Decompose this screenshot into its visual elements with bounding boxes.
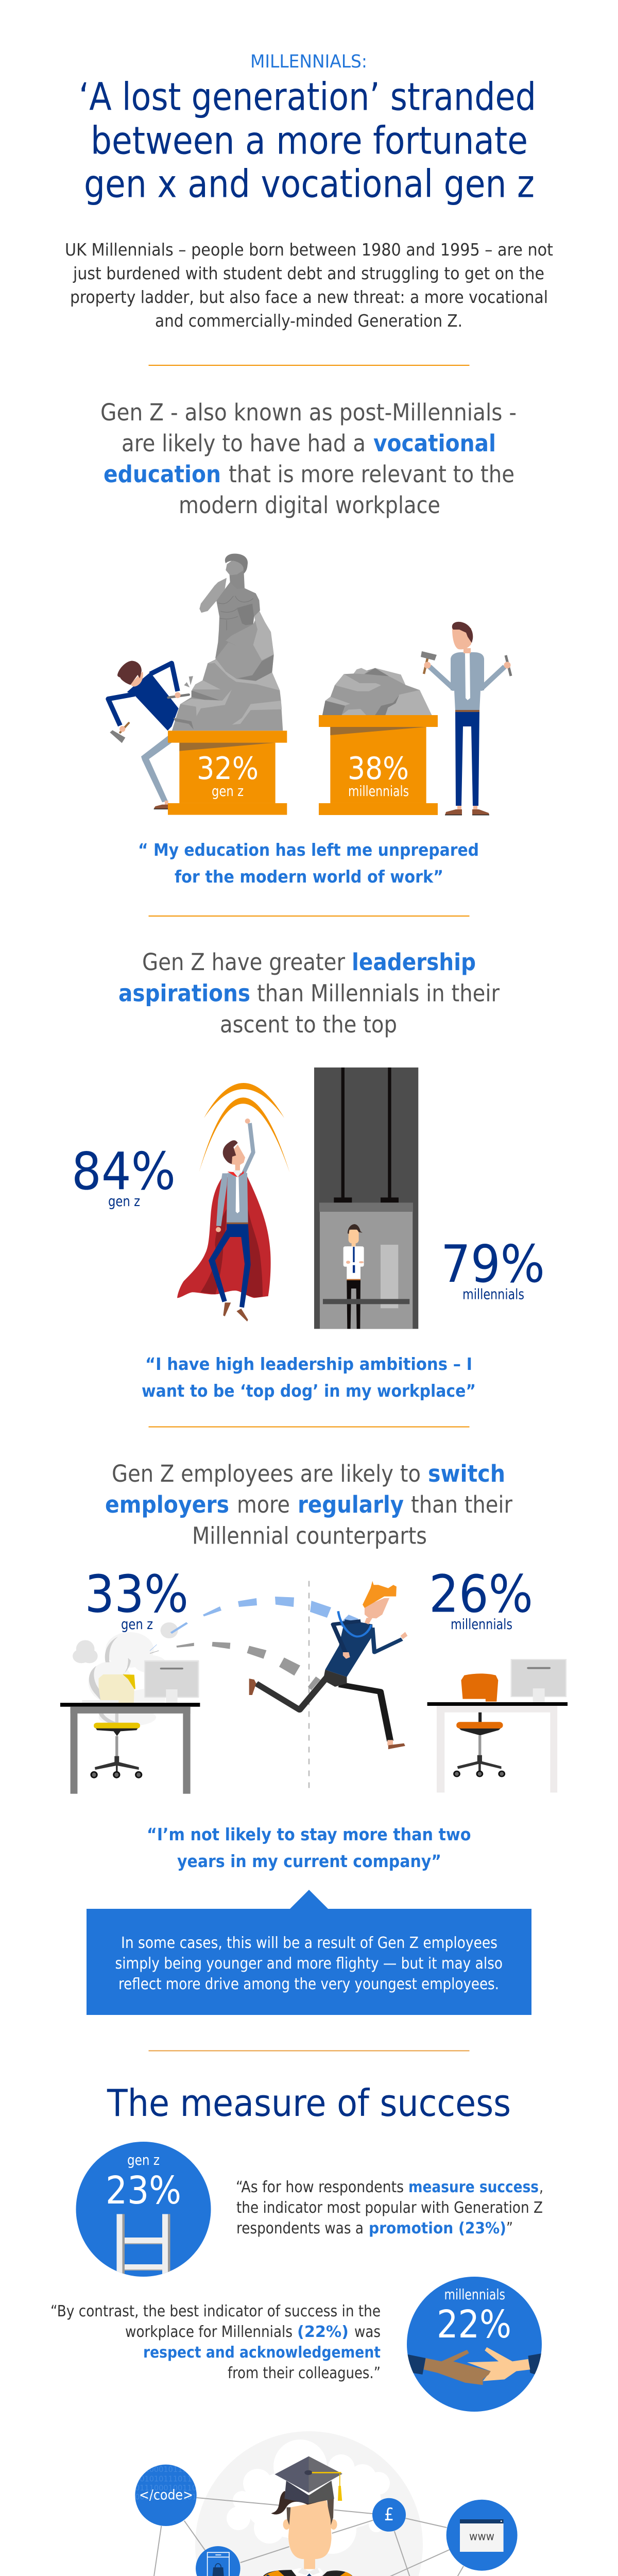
heading: Gen Z have greater <box>142 948 345 976</box>
stat: 84% gen z: gen z <box>108 1193 140 1210</box>
intro paragraph: property ladder, but also face a new threat: a more vocational <box>70 287 548 307</box>
icon: handshake <box>406 2347 543 2385</box>
header <box>65 52 553 331</box>
section: vocational education <box>100 399 517 887</box>
heading: switch <box>428 1460 505 1487</box>
badge: millennials handshake <box>406 2277 543 2412</box>
icon: code: 0010101110111 <box>135 2475 197 2484</box>
lift shaft with man <box>314 1067 418 1329</box>
superhero figure <box>177 1118 271 1321</box>
heading: The measure of success <box>107 2081 511 2125</box>
quote: years in my current company” <box>177 1851 441 1871</box>
intro paragraph: UK Millennials – people born between 1980 and 1995 – are not <box>65 240 553 260</box>
text: gen z promotion: ” <box>506 2219 513 2238</box>
pedestal: millennials <box>319 715 438 815</box>
heading: Millennial counterparts <box>192 1522 427 1550</box>
title: ‘A lost generation’ stranded <box>79 75 536 120</box>
badge: millennials handshake: millennials <box>444 2286 505 2303</box>
badge: gen z ladder <box>76 2142 211 2278</box>
text: gen z promotion: the indicator most popular with Generation Z <box>236 2199 543 2217</box>
icon: www window: www <box>469 2531 494 2544</box>
heading: regularly <box>298 1491 404 1518</box>
heading: employers <box>105 1491 229 1518</box>
heading: ascent to the top <box>220 1011 397 1038</box>
yellow chair <box>90 1723 142 1778</box>
text: gen z promotion: promotion (23%) <box>369 2219 506 2238</box>
title: between a more fortunate <box>91 118 528 163</box>
stat: 38% millennials: 38% <box>348 751 409 787</box>
stat: 32% gen z <box>197 751 259 800</box>
heading: Gen Z employees are likely to <box>112 1460 421 1487</box>
man standing with hammer and chisel <box>421 622 511 815</box>
left desk with vanished worker smoke <box>60 1622 200 1794</box>
quote <box>147 1824 471 1871</box>
text: millennials respect: workplace for Millennials <box>125 2323 293 2341</box>
illustration: carving man and statue on pedestal <box>108 554 287 815</box>
icon: code: 1010001011101 <box>135 2465 197 2474</box>
callout: flighty <box>87 1890 531 2015</box>
quote: “I have high leadership ambitions – I <box>145 1354 472 1374</box>
heading: modern digital workplace <box>179 492 440 519</box>
badge: gen z ladder: 23% <box>106 2168 181 2213</box>
pedestal: gen z <box>168 731 287 815</box>
quote: for the modern world of work” <box>175 867 443 887</box>
icon: pound: £ <box>384 2504 394 2525</box>
callout: flighty: reflect more drive among the very youngest employees. <box>118 1975 499 1993</box>
text: millennials respect: from their colleagues.” <box>228 2364 381 2382</box>
text: gen z promotion: respondents was a <box>236 2219 364 2238</box>
heading <box>100 399 517 519</box>
section: leadership aspirations <box>72 948 545 1401</box>
badge: gen z ladder: gen z <box>127 2151 160 2168</box>
icon: code: 0010110010101 <box>135 2493 197 2502</box>
illustration: graduate and skills network <box>114 2431 518 2576</box>
heading: Gen Z - also known as post-Millennials - <box>100 399 517 426</box>
section: the measure of success <box>50 2081 543 2412</box>
stat: 38% millennials <box>348 751 409 800</box>
stat: 79% millennials: millennials <box>462 1286 524 1302</box>
heading: than Millennials in their <box>257 980 500 1007</box>
intro paragraph <box>65 240 553 331</box>
text: gen z promotion <box>236 2178 543 2238</box>
stat: 32% gen z: 32% <box>197 751 259 787</box>
text: millennials respect: respect and acknowledgement <box>143 2344 381 2362</box>
heading: aspirations <box>118 980 250 1007</box>
icon: rising arcs <box>199 1083 289 1173</box>
heading: are likely to have had a <box>122 430 366 457</box>
icon: code: 0111000100110 <box>135 2483 197 2493</box>
icon: code <box>135 2465 197 2526</box>
text: gen z promotion: “As for how respondents <box>236 2178 404 2196</box>
icon: ladder <box>116 2214 170 2278</box>
quote <box>142 1354 476 1401</box>
callout: flighty: In some cases, this will be a result of Gen Z employees <box>121 1934 497 1952</box>
man carving statue <box>108 661 193 809</box>
title <box>79 75 536 206</box>
running man <box>249 1581 407 1749</box>
icon: phone shopping <box>196 2546 241 2576</box>
text: gen z promotion: measure success <box>408 2178 539 2196</box>
badge: millennials handshake: 22% <box>437 2302 511 2347</box>
text: millennials respect: was <box>354 2323 381 2341</box>
background circle and clouds <box>195 2431 423 2576</box>
heading: than their <box>411 1491 512 1518</box>
icon: www window <box>447 2500 518 2571</box>
dashed boundary line <box>308 1581 310 1790</box>
heading: that is more relevant to the <box>229 461 514 488</box>
blue dashed jump path <box>203 1597 358 1631</box>
heading <box>105 1460 512 1550</box>
heading: leadership <box>352 948 476 976</box>
text: millennials respect: (22%) <box>297 2323 349 2341</box>
text: millennials respect: “By contrast, the best indicator of success in the <box>50 2302 381 2320</box>
stat: 32% gen z: gen z <box>212 783 244 800</box>
quote: want to be ‘top dog’ in my workplace” <box>142 1381 476 1401</box>
text: gen z promotion: , <box>539 2178 543 2196</box>
graduate figure <box>255 2456 360 2576</box>
quote <box>138 840 479 887</box>
heading <box>118 948 500 1038</box>
network links <box>149 2498 464 2576</box>
callout: flighty: simply being younger and more flighty — but it may also <box>115 1955 503 1973</box>
quote: “ My education has left me unprepared <box>138 840 479 860</box>
mortarboard <box>274 2456 342 2504</box>
illustration: rock on pedestal <box>319 668 438 815</box>
stat: 26% millennials: 26% <box>429 1564 533 1624</box>
text: millennials respect <box>50 2302 381 2382</box>
stat: 33% gen z: gen z <box>121 1616 153 1633</box>
grey dashed jump path <box>176 1642 320 1690</box>
heading: more <box>237 1491 290 1518</box>
kicker: MILLENNIALS: <box>250 52 367 72</box>
intro paragraph: just burdened with student debt and struggling to get on the <box>73 263 544 283</box>
section: switching employers <box>60 1460 568 2015</box>
title: gen x and vocational gen z <box>84 162 535 206</box>
stat: 26% millennials: millennials <box>451 1616 512 1633</box>
stat: 84% gen z: 84% <box>72 1141 176 1201</box>
quote: “I’m not likely to stay more than two <box>147 1824 471 1844</box>
intro paragraph: and commercially-minded Generation Z. <box>155 311 462 331</box>
stat: 79% millennials: 79% <box>441 1234 545 1294</box>
icon: code: </code> <box>139 2487 193 2503</box>
icon: pound <box>372 2498 406 2532</box>
right desk with orange chair <box>427 1659 568 1792</box>
heading: education <box>104 461 221 488</box>
statue <box>172 554 283 731</box>
stat: 33% gen z: 33% <box>84 1564 188 1624</box>
stat: 38% millennials: millennials <box>348 783 409 800</box>
heading: vocational <box>373 430 496 457</box>
